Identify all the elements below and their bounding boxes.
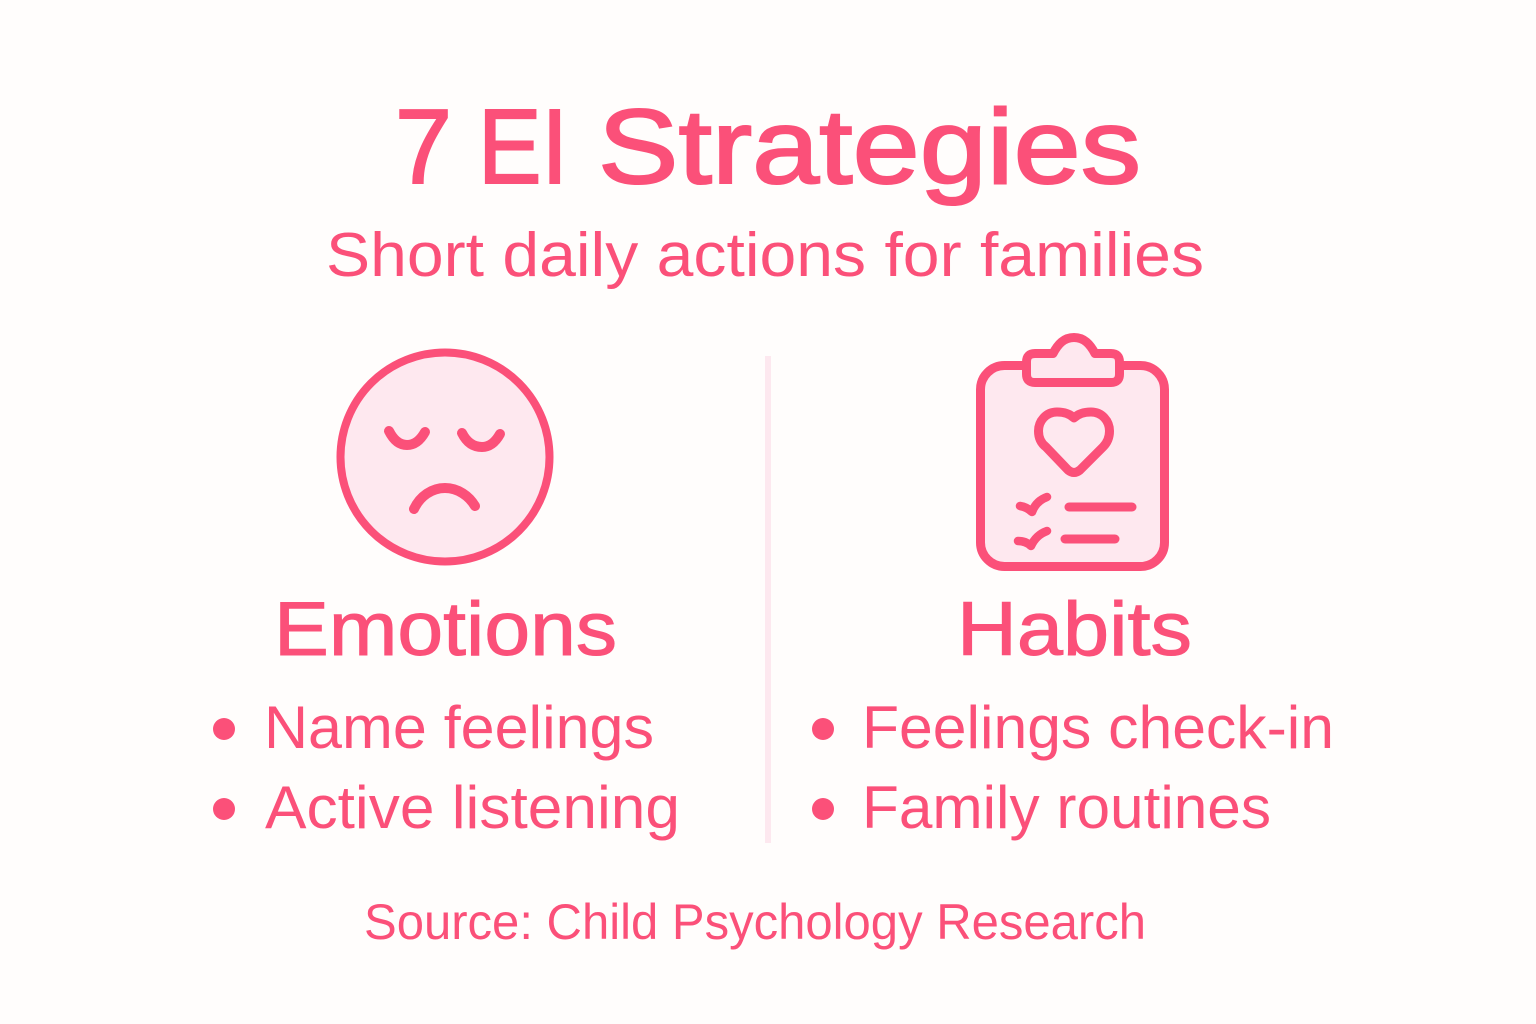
source line: Source: Child Psychology Research [364,894,1146,950]
icon: sad face [340,352,550,562]
title [395,88,1141,206]
list: habits: Family routines [862,774,1271,841]
list: emotions: Name feelings [264,694,654,761]
heading: habits: Habits [957,587,1192,672]
title: Strategies [598,88,1141,206]
list: habits: Feelings check-in [862,694,1334,761]
panel: habits [812,338,1334,841]
subtitle: Short daily actions for families [326,221,1204,290]
list: habits [812,694,1334,841]
panel: emotions [213,352,680,841]
title: EI [478,88,568,206]
title: 7 [395,88,452,206]
icon: clipboard with heart [980,338,1164,566]
list: emotions [213,694,680,841]
list: emotions: Active listening [265,774,680,841]
heading: emotions: Emotions [274,587,617,672]
